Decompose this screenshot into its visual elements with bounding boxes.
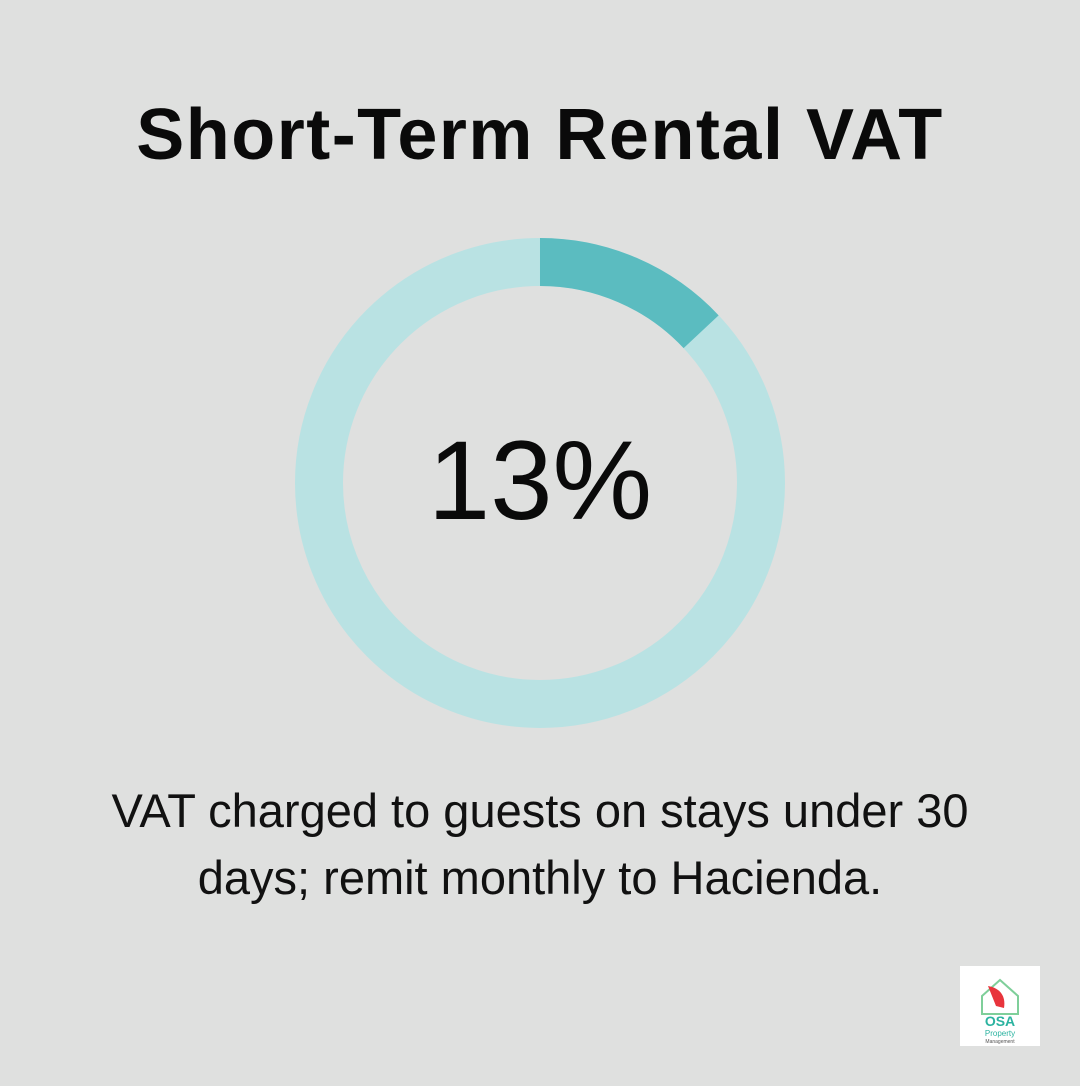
title: Short-Term Rental VAT bbox=[136, 95, 944, 175]
logo bbox=[960, 966, 1040, 1046]
logo: OSA bbox=[985, 1013, 1015, 1029]
donut chart: 13% bbox=[428, 418, 652, 543]
caption: VAT charged to guests on stays under 30 days; remit monthly to Hacienda. bbox=[112, 784, 968, 904]
logo: Property bbox=[985, 1029, 1015, 1038]
logo: Management bbox=[985, 1039, 1015, 1045]
